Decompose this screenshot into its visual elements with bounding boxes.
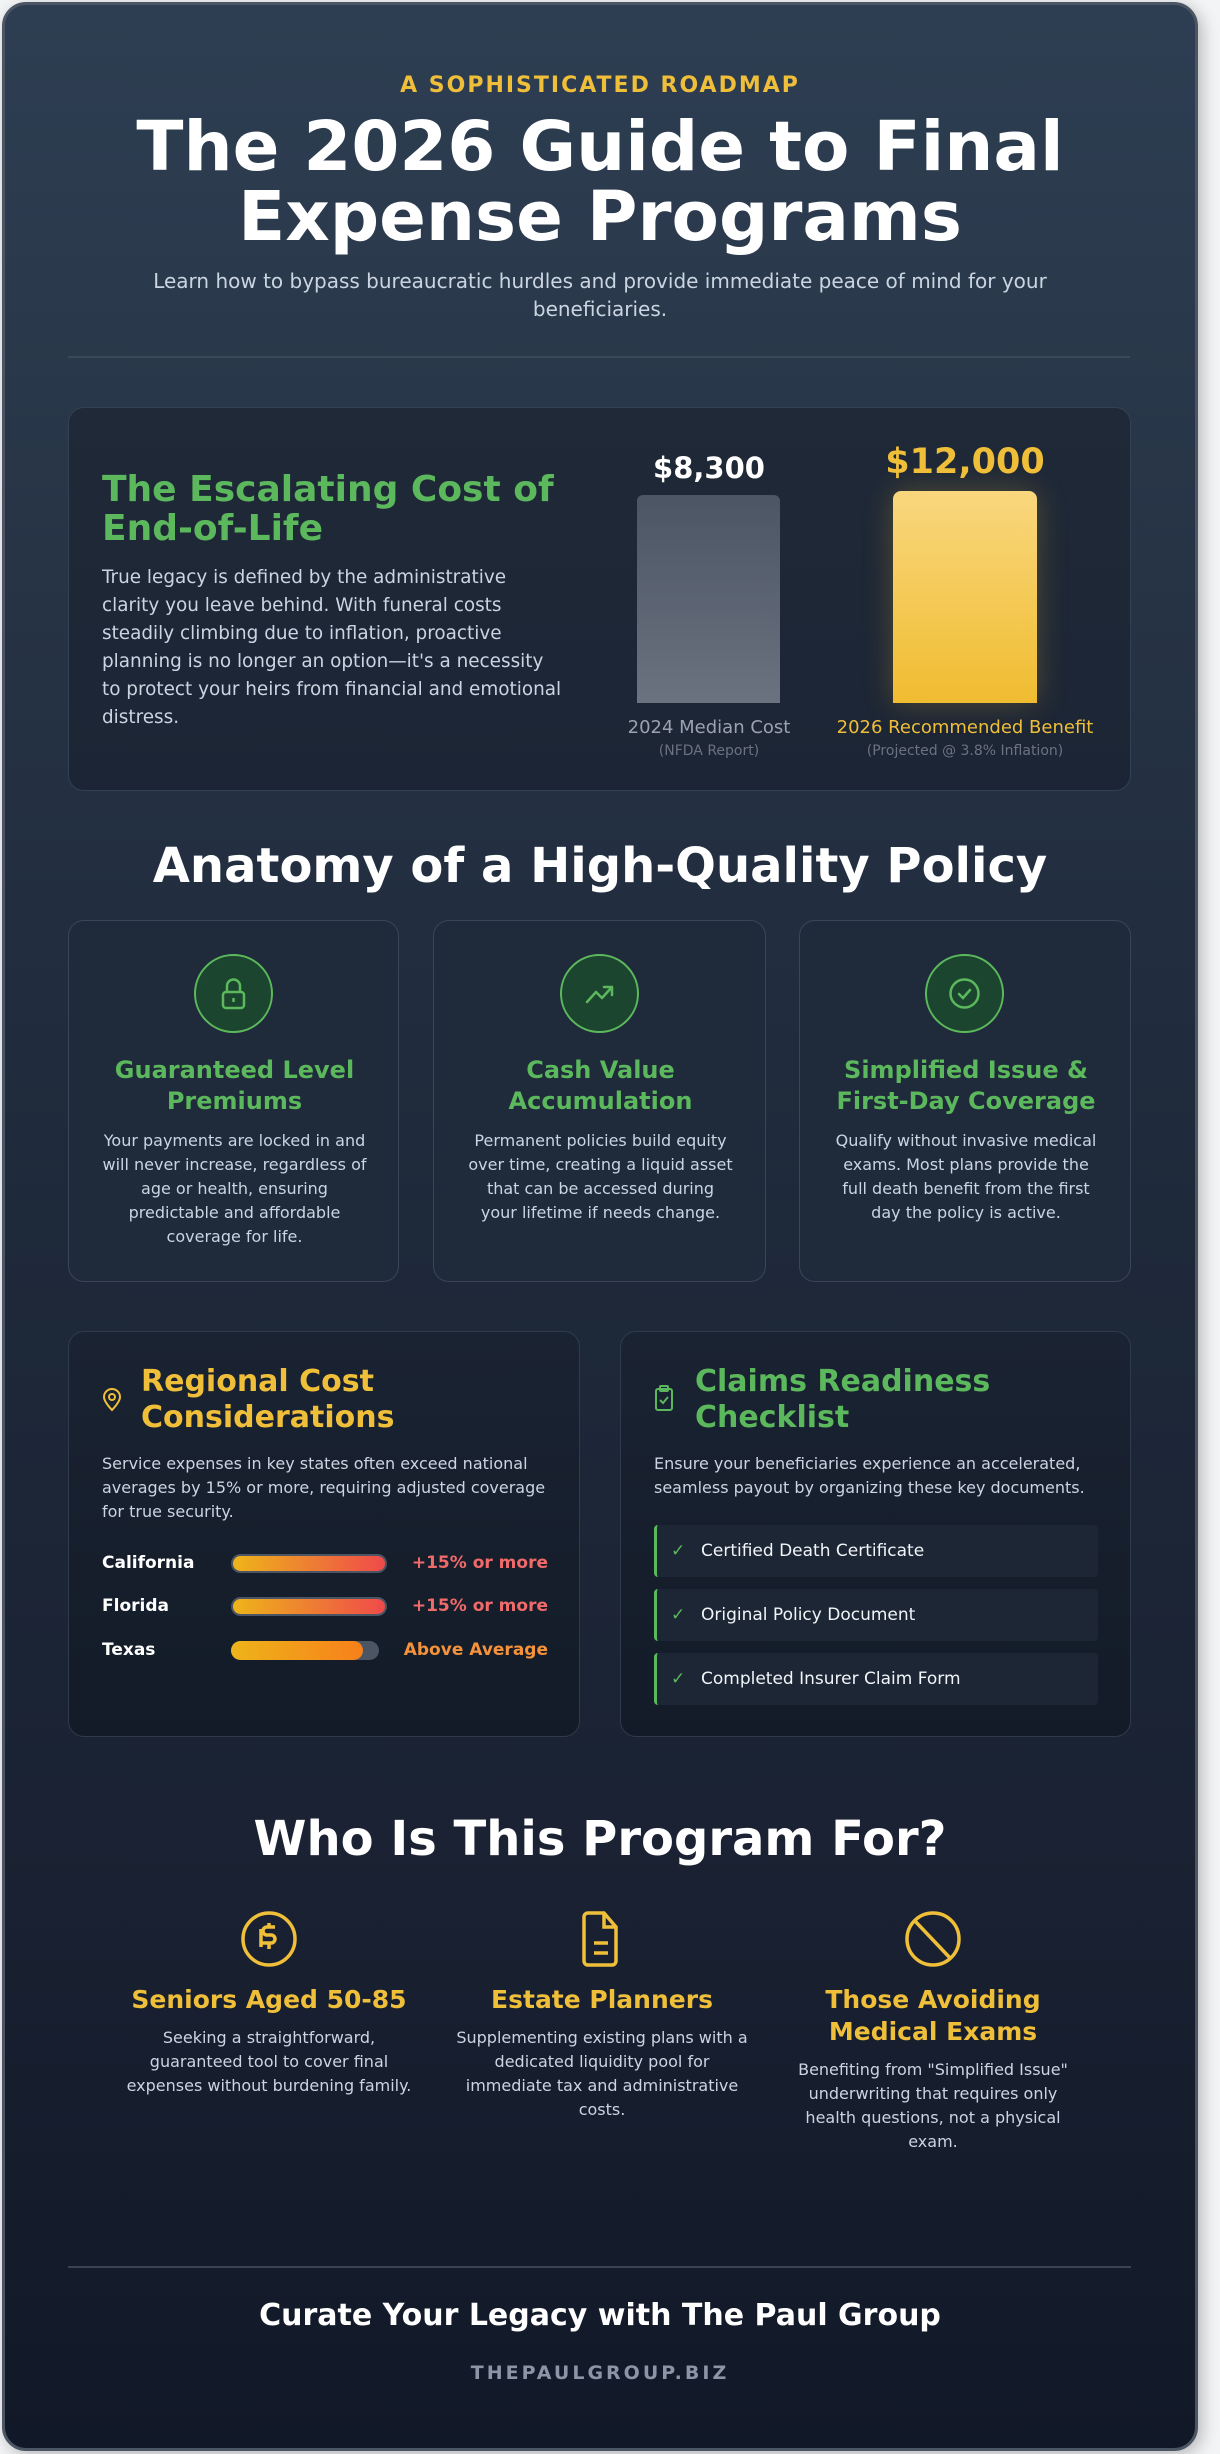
- item: death certificate: [654, 1525, 1098, 1577]
- panel: cash value: [433, 920, 766, 1282]
- item: policy document: ✓: [671, 1605, 685, 1625]
- row: california: [102, 1553, 548, 1573]
- bar chart: 2024 Median Cost: [628, 717, 790, 738]
- heading: Claims Readiness Checklist: [695, 1364, 990, 1435]
- title: Guaranteed Level Premiums: [115, 1056, 354, 1115]
- title: Seniors Aged 50-85: [131, 1985, 407, 2014]
- row: texas: Above Average: [404, 1640, 548, 1660]
- panel: regional cost: [68, 1331, 580, 1737]
- row: california: +15% or more: [412, 1553, 548, 1573]
- item: claim form: Completed Insurer Claim Form: [701, 1669, 961, 1689]
- row: texas: Texas: [102, 1640, 155, 1660]
- heading: who is this for: Who Is This Program For?: [254, 1811, 946, 1867]
- text: Supplementing existing plans with a dedicated liquidity pool for immediate tax and administrative costs.: [456, 2028, 748, 2119]
- title: Simplified Issue & First-Day Coverage: [836, 1056, 1096, 1115]
- row: california: California: [102, 1553, 194, 1573]
- panel: escalating cost: [68, 407, 1131, 791]
- heading: Regional Cost Considerations: [141, 1364, 394, 1435]
- text: legacy description: True legacy is defined by the administrative clarity you leave behind. With funeral costs steadily climbing due to inflation, proactive planning is no longer an option—it's a necessity to protect your heirs from financial and emotional distress.: [102, 567, 561, 728]
- item: claim form: ✓: [671, 1669, 685, 1689]
- icon: check circle: [925, 954, 1004, 1033]
- column: estate planners: [456, 1911, 748, 2119]
- bar: 2026 recommended: $12,000: [885, 442, 1045, 482]
- item: death certificate: Certified Death Certificate: [701, 1541, 924, 1561]
- title: Those Avoiding Medical Exams: [825, 1985, 1041, 2046]
- subtitle: Learn how to bypass bureaucratic hurdles and provide immediate peace of mind for your beneficiaries.: [153, 269, 1047, 321]
- row: florida: Florida: [102, 1596, 169, 1616]
- icon: clipboard: [655, 1385, 673, 1411]
- text: Ensure your beneficiaries experience an accelerated, seamless payout by organizing these key documents.: [654, 1454, 1085, 1497]
- title: Expense Programs: [238, 177, 962, 257]
- text: Benefiting from "Simplified Issue" underwriting that requires only health questions, not a physical exam.: [798, 2060, 1068, 2151]
- row: florida: +15% or more: [412, 1596, 548, 1616]
- panel: claims checklist: [620, 1331, 1131, 1737]
- panel: simplified issue: [799, 920, 1131, 1282]
- icon: document: [582, 1911, 618, 1967]
- icon: lock: [194, 954, 273, 1033]
- item: policy document: Original Policy Document: [701, 1605, 915, 1625]
- item: claim form: [654, 1653, 1098, 1705]
- bar chart: (NFDA Report): [659, 743, 759, 759]
- item: death certificate: ✓: [671, 1541, 685, 1561]
- panel: guaranteed premiums: [68, 920, 399, 1282]
- column: avoiding exams: [798, 1911, 1068, 2151]
- bar chart: [628, 442, 1093, 759]
- heading: escalating cost: The Escalating Cost of End-of-Life: [102, 469, 554, 549]
- title: Estate Planners: [491, 1985, 713, 2014]
- heading: anatomy: Anatomy of a High-Quality Policy: [153, 838, 1047, 894]
- icon: trending up: [560, 954, 639, 1033]
- bar chart: (Projected @ 3.8% Inflation): [867, 743, 1063, 759]
- title: The 2026 Guide to Final: [136, 107, 1064, 187]
- row: florida: [102, 1596, 548, 1616]
- footer: website: THEPAULGROUP.BIZ: [471, 2362, 729, 2384]
- icon: ban: [905, 1911, 961, 1967]
- footer: call to action: Curate Your Legacy with The Paul Group: [259, 2298, 941, 2333]
- bar chart: 2026 Recommended Benefit: [837, 717, 1093, 738]
- title: [136, 107, 1064, 257]
- bar: 2024 median: $8,300: [653, 451, 765, 485]
- text: Permanent policies build equity over time, creating a liquid asset that can be accessed during your lifetime if needs change.: [468, 1131, 733, 1222]
- icon: dollar circle: [241, 1911, 297, 1967]
- item: policy document: [654, 1589, 1098, 1641]
- title: Cash Value Accumulation: [509, 1056, 692, 1115]
- icon: map pin: [103, 1388, 121, 1412]
- text: Your payments are locked in and will never increase, regardless of age or health, ensuring predictable and affordable coverage for life.: [102, 1131, 367, 1246]
- eyebrow: A SOPHISTICATED ROADMAP: [400, 73, 800, 98]
- text: Qualify without invasive medical exams. Most plans provide the full death benefit from the first day the policy is active.: [836, 1131, 1096, 1222]
- text: Seeking a straightforward, guaranteed tool to cover final expenses without burdening family.: [127, 2028, 411, 2095]
- text: Service expenses in key states often exceed national averages by 15% or more, requiring adjusted coverage for true security.: [102, 1454, 545, 1521]
- row: texas: [102, 1640, 548, 1660]
- column: seniors: [127, 1911, 411, 2095]
